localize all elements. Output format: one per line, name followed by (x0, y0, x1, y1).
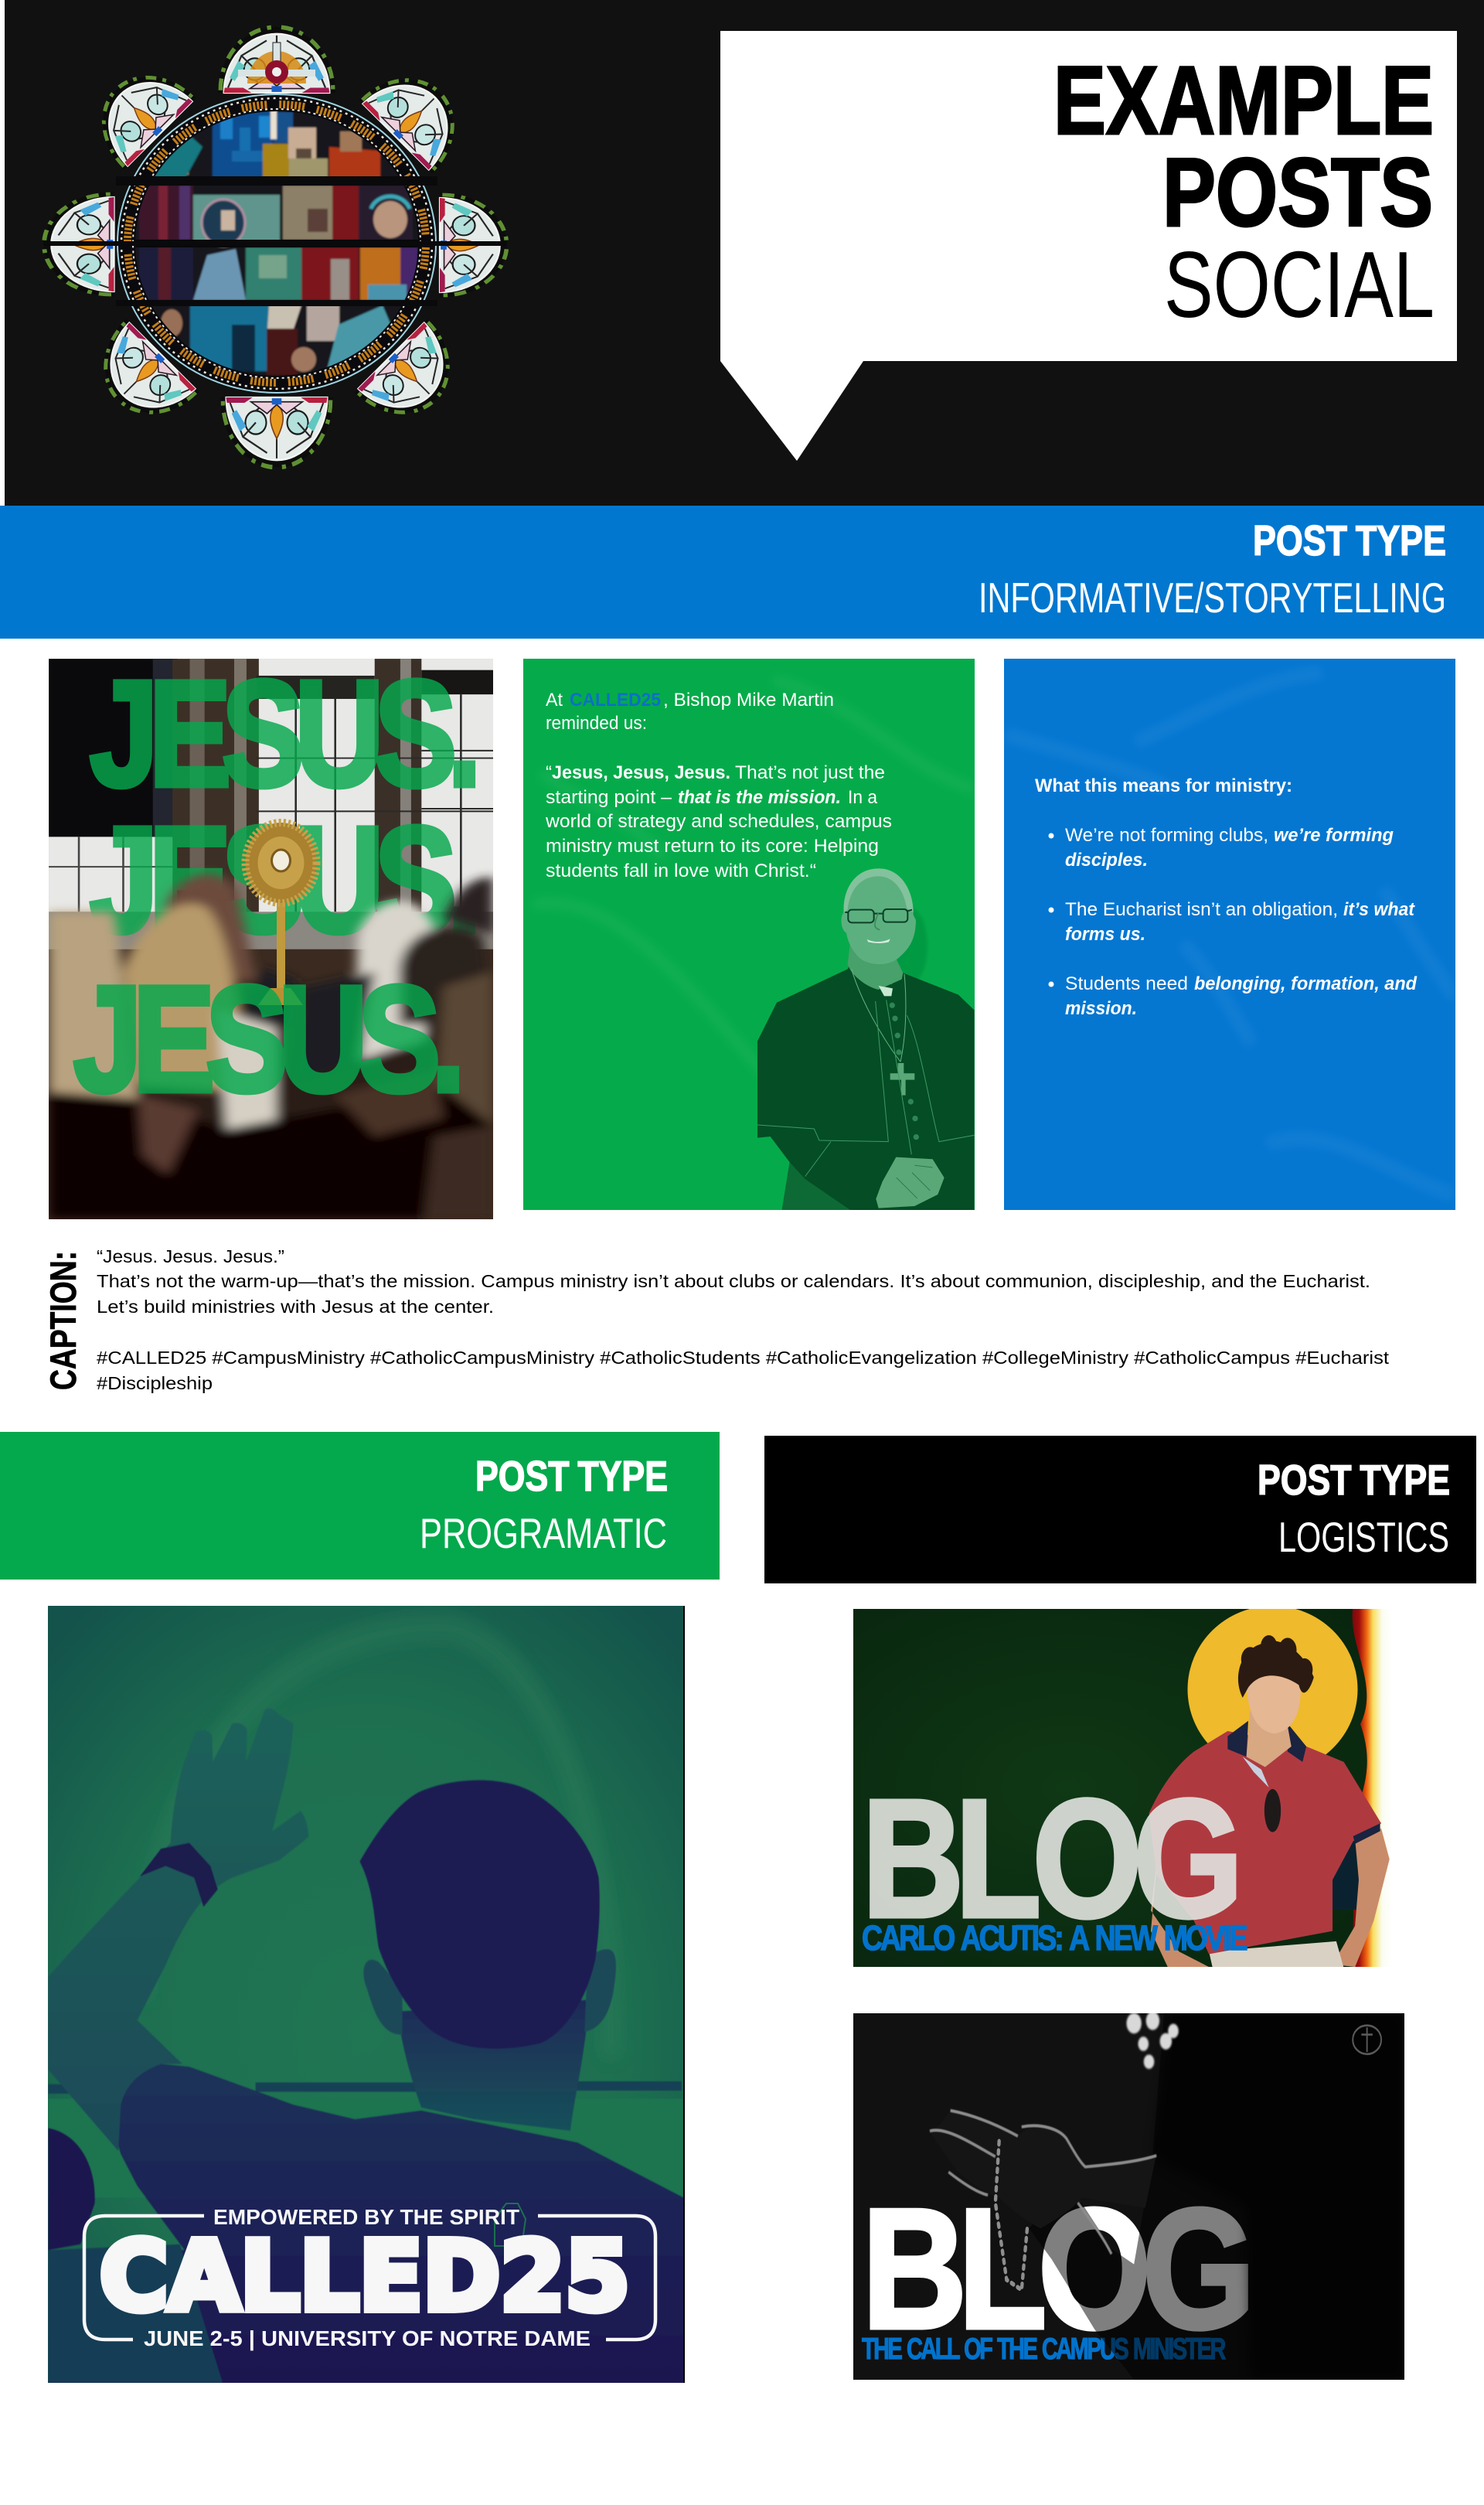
band subheading: programatic: PROGRAMATIC (420, 1509, 667, 1557)
post 1: jesus photo (49, 649, 493, 1226)
praying hands (930, 2111, 1156, 2228)
quote text: that is the mission. (678, 787, 841, 808)
quote text: , Bishop Mike Martin (663, 690, 834, 711)
caption text: Let’s build ministries with Jesus at the center. (97, 1297, 494, 1317)
post 2: green quote panel (523, 659, 975, 1210)
quote text: world of strategy and schedules, campus (545, 811, 892, 832)
band heading: post type: POST TYPE (475, 1452, 668, 1500)
panel texture (1005, 673, 1455, 1195)
panel texture (533, 680, 974, 1082)
caption text: #Discipleship (97, 1373, 213, 1393)
rosary beads (996, 2142, 1027, 2290)
ministry list: mission. (1065, 998, 1137, 1019)
quote text: reminded us: (546, 713, 647, 734)
dark foreground head (48, 2128, 95, 2250)
green post type band (0, 1432, 720, 1580)
boy face (1247, 1711, 1292, 1767)
neck (397, 2000, 589, 2131)
head hair (359, 1781, 600, 2049)
boy arms (1333, 1828, 1390, 1967)
title: example posts social: POSTS (1162, 139, 1433, 247)
central medallion (43, 94, 507, 393)
blue post type band (0, 506, 1484, 639)
logistics post 1: carlo acutis blog (853, 1606, 1393, 1968)
boy trousers (1209, 1941, 1344, 1968)
quote text: That’s not just the (735, 762, 885, 783)
portrait of carlo acutis (1149, 1606, 1390, 1968)
shadowed figure (1029, 2013, 1404, 2380)
man torso (48, 2064, 684, 2384)
jesus headline line 1: JESUS. (90, 649, 474, 818)
caption text: #CALLED25 #CampusMinistry #CatholicCampusMinistry #CatholicStudents #CatholicEvangelization #CollegeMinistry #CatholicCampus #Eucharist (97, 1348, 1390, 1368)
blog subtitle: CARLO ACUTIS: A NEW MOVIE (862, 1919, 1247, 1958)
logistics post 2: campus minister blog (853, 2012, 1404, 2380)
ministry list: Students need (1065, 973, 1188, 994)
horizontal rail (48, 2086, 682, 2089)
header panel (5, 0, 1484, 506)
jesus headline line 2: JESUS. (90, 796, 474, 964)
post 3: blue ministry panel (1004, 659, 1455, 1210)
blog title: BLOG (862, 1764, 1235, 1953)
called25 logo lockup: JUNE 2-5 | UNIVERSITY OF NOTRE DAME (144, 2326, 591, 2350)
ministry list: it’s what (1343, 899, 1415, 920)
ministry list: The Eucharist isn’t an obligation, (1065, 899, 1338, 920)
wrist watch (140, 1843, 218, 1907)
caption text (97, 1246, 1390, 1393)
speech bubble (720, 31, 1457, 461)
quote text: ministry must return to its core: Helping (546, 836, 879, 857)
bishop portrait (757, 868, 975, 1210)
quote text: starting point – (546, 787, 672, 808)
blog subtitle: THE CALL OF THE CAMPUS MINISTER (862, 2333, 1226, 2366)
small corner logo (1353, 2026, 1381, 2054)
black post type band (764, 1436, 1476, 1583)
window petals (44, 27, 507, 467)
blurred backdrop arch (142, 1627, 611, 2058)
called25 logo lockup: EMPOWERED BY THE SPIRIT (213, 2205, 519, 2229)
quote text (545, 690, 892, 881)
blog title: BLOG (862, 2172, 1247, 2364)
ministry list: disciples. (1065, 850, 1148, 871)
stained glass rose window (43, 27, 507, 467)
ears (363, 1949, 616, 2035)
boy hair (1238, 1641, 1314, 1698)
called25 logo lockup: CALLED25 (100, 2222, 630, 2333)
ministry list: What this means for ministry: (1035, 775, 1292, 796)
quote text: CALLED25 (570, 690, 661, 711)
ministry list: we’re forming (1274, 825, 1394, 846)
jesus headline line 3: JESUS. (73, 955, 458, 1123)
film burn edge (1341, 1609, 1393, 1967)
quote text: “ (546, 762, 552, 783)
boy red polo (1149, 1731, 1381, 1954)
title: example posts social (1053, 47, 1435, 337)
ministry list: forms us. (1065, 924, 1145, 945)
ministry list: We’re not forming clubs, (1065, 825, 1268, 846)
caption text: “Jesus. Jesus. Jesus.” (97, 1246, 284, 1266)
blurred congregation (49, 874, 493, 1219)
vertical caption label: CAPTION: (43, 1251, 83, 1390)
lace veil (1126, 2012, 1179, 2069)
programmatic post: called25 poster (48, 1606, 685, 2384)
caption text: That’s not the warm-up—that’s the mission. Campus ministry isn’t about clubs or calendars. It’s about communion, discipleship, and the Eucharist. (97, 1271, 1370, 1291)
ministry list (1035, 775, 1418, 1019)
monstrance (246, 823, 317, 1005)
raised arm and hand (48, 1709, 308, 2151)
quote text: Jesus, Jesus, Jesus. (552, 762, 730, 783)
quote text: At (546, 690, 563, 711)
quote text: In a (848, 787, 878, 808)
ministry list: belonging, formation, and (1194, 973, 1418, 994)
band heading: post type: POST TYPE (1253, 516, 1446, 564)
quote text: students fall in love with Christ.“ (546, 861, 816, 881)
